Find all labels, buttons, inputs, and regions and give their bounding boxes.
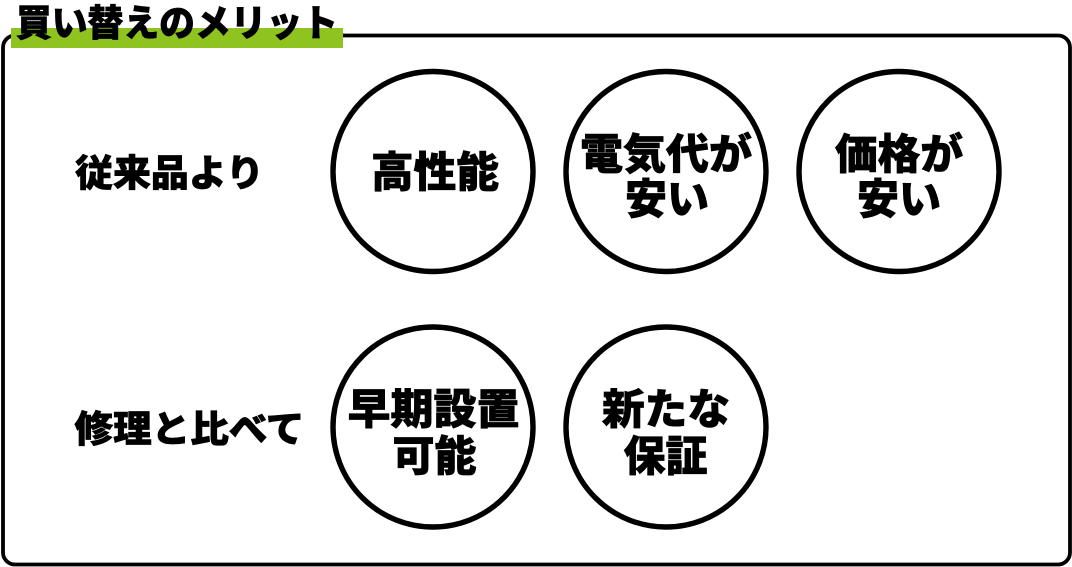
circle: quick installation possible: 早期設置: [348, 386, 520, 433]
circle: quick installation possible: [333, 327, 533, 527]
circle: lower price: [799, 72, 999, 272]
circle: new warranty: 新たな: [602, 386, 730, 433]
circle: lower electricity bill: 電気代が: [580, 131, 752, 178]
circle: lower price: 安い: [857, 176, 941, 223]
heading: title with green underline: 買い替えのメリット: [16, 3, 338, 44]
circle: lower electricity bill: [566, 72, 766, 272]
circle: high performance: [333, 72, 533, 272]
circle: quick installation possible: 可能: [392, 433, 476, 480]
row label: compared with repair: 修理と比べて: [74, 409, 304, 450]
circle: lower price: 価格が: [835, 131, 963, 178]
row label: compared with conventional: 従来品より: [75, 153, 264, 194]
circle: new warranty: [566, 327, 766, 527]
circle: lower electricity bill: 安い: [625, 176, 709, 223]
circle: new warranty: 保証: [624, 433, 708, 480]
circle: high performance: 高性能: [371, 149, 499, 196]
